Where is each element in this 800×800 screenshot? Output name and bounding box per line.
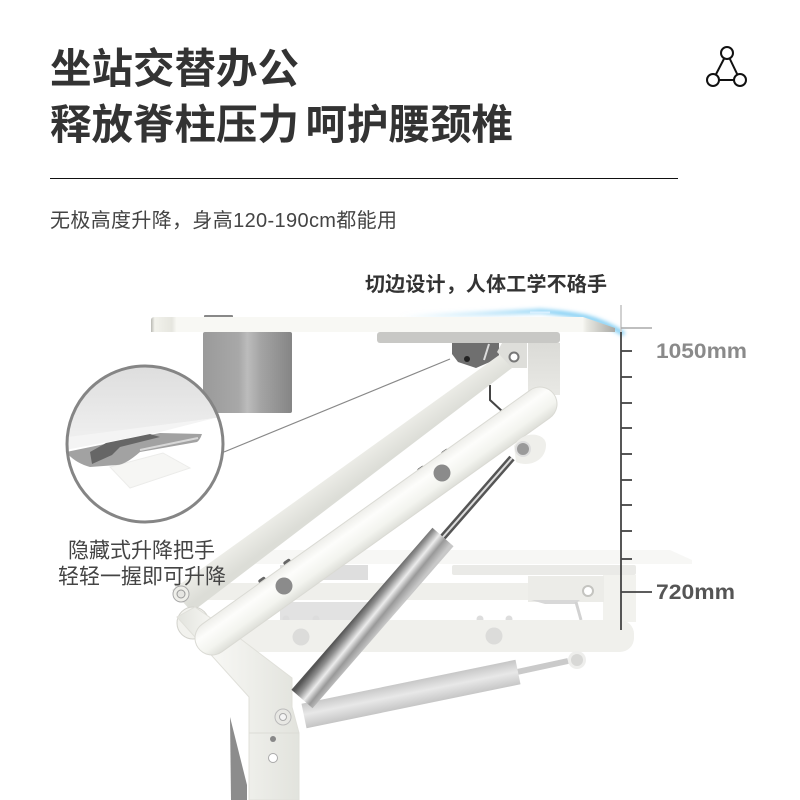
callout: handle [58, 540, 226, 588]
title: 释放脊柱压力 [50, 101, 299, 148]
leader line [224, 359, 450, 452]
label: 1050mm: 1050mm [656, 340, 747, 363]
gas spring, upper [302, 435, 546, 699]
title [50, 45, 513, 148]
label: 720mm: 720mm [656, 581, 735, 604]
magnifier detail of handle [66, 364, 224, 524]
desk top [151, 311, 624, 334]
main arm [212, 404, 540, 638]
callout: handle: 隐藏式升降把手 [68, 540, 215, 562]
height scale [621, 305, 652, 630]
title: 坐站交替办公 [50, 45, 299, 92]
cup holder [203, 332, 292, 413]
clamp [230, 717, 247, 800]
lowered desk ghost [175, 550, 692, 669]
icon: triangle of nodes [707, 47, 746, 86]
callout: handle: 轻轻一握即可升降 [58, 566, 226, 588]
upper arm [172, 343, 527, 639]
column base and elbow [177, 607, 299, 800]
title: 呵护腰颈椎 [306, 101, 513, 148]
subtitle: 无极高度升降，身高120-190cm都能用 [50, 209, 397, 232]
callout: edge cut: 切边设计，人体工学不硌手 [365, 273, 607, 296]
gas spring, lower [275, 661, 568, 725]
under-desk bracket [377, 332, 560, 412]
